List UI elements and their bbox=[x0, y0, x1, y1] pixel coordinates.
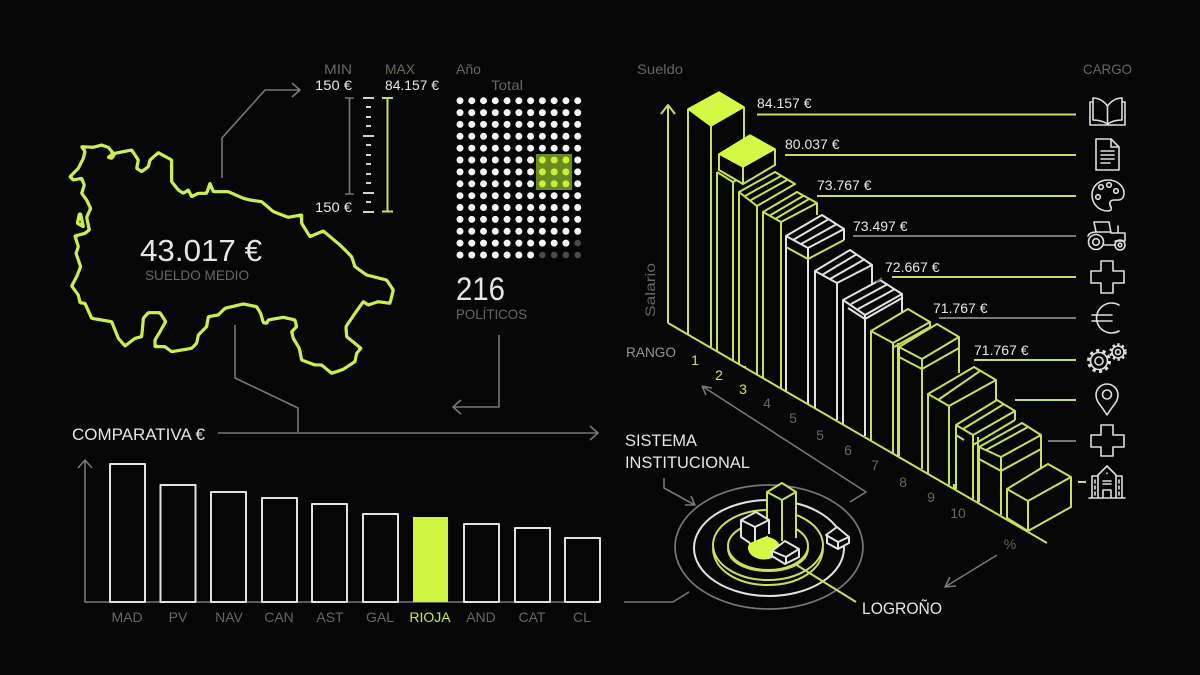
year label: Año bbox=[456, 61, 481, 77]
average salary value: 43.017 € bbox=[140, 233, 262, 268]
average salary label: SUELDO MEDIO bbox=[145, 267, 249, 283]
bar labels bbox=[111, 609, 591, 625]
bar 5 bbox=[786, 215, 844, 404]
bar 11 bbox=[956, 400, 1015, 503]
arrow: map to range scale bbox=[222, 83, 300, 178]
rank numbers: 4 bbox=[763, 395, 771, 411]
rank numbers: 2 bbox=[715, 367, 723, 383]
rank numbers: 7 bbox=[871, 457, 879, 473]
arrow: rank axis bbox=[702, 386, 866, 502]
max value: 84.157 € bbox=[385, 77, 439, 93]
salary values: 73.767 € bbox=[817, 177, 872, 193]
bar 13 bbox=[1007, 464, 1071, 531]
icon: document bbox=[1096, 139, 1119, 170]
arrow: percent bbox=[945, 555, 997, 587]
white cube left bbox=[741, 512, 769, 543]
rank numbers: 3 bbox=[739, 381, 747, 397]
y axis arrow bbox=[661, 105, 675, 323]
green range bar bbox=[382, 98, 393, 212]
icon: book bbox=[1090, 98, 1125, 125]
bar labels: RIOJA bbox=[409, 609, 451, 625]
white cube front bbox=[772, 541, 799, 564]
bar labels: MAD bbox=[111, 609, 143, 625]
rank numbers: % bbox=[1004, 536, 1016, 552]
bar 8 bbox=[871, 309, 930, 456]
panel: institutional system diagram bbox=[624, 431, 942, 618]
icon: cross bbox=[1091, 261, 1124, 293]
system title: INSTITUCIONAL bbox=[625, 453, 750, 472]
panel: map of La Rioja bbox=[70, 145, 393, 373]
bar 1 bbox=[688, 92, 744, 347]
comparison heading: COMPARATIVA € bbox=[72, 425, 206, 444]
rank numbers: 8 bbox=[899, 474, 907, 490]
arrow: politicians to comparison bbox=[453, 335, 499, 414]
gray range bar bbox=[345, 98, 354, 194]
bar labels: CAT bbox=[519, 609, 546, 625]
cargo heading: CARGO bbox=[1083, 61, 1132, 77]
rank numbers: 10 bbox=[950, 505, 966, 521]
icon: location pin bbox=[1096, 384, 1118, 415]
rank title: RANGO bbox=[626, 344, 676, 360]
bar 2 bbox=[717, 135, 775, 360]
green highlight square bbox=[536, 154, 572, 190]
connector: chart to rings bbox=[624, 592, 689, 602]
chart axes bbox=[78, 460, 600, 602]
rank numbers: 5 bbox=[816, 427, 824, 443]
chart heading salary: Sueldo bbox=[637, 61, 683, 77]
rank numbers: 5 bbox=[789, 410, 797, 426]
white cube right bbox=[826, 527, 849, 549]
tower bbox=[767, 483, 796, 542]
rank numbers: 1 bbox=[691, 352, 699, 368]
total label: Total bbox=[491, 77, 523, 93]
bar labels: CAN bbox=[264, 609, 294, 625]
rank numbers: 9 bbox=[927, 489, 935, 505]
system title: SISTEMA bbox=[625, 431, 698, 450]
bar labels: PV bbox=[169, 609, 188, 625]
center green disc bbox=[748, 536, 780, 560]
min label: MIN bbox=[324, 61, 352, 77]
map outline bbox=[70, 145, 393, 373]
leader line: Logroño bbox=[795, 564, 856, 602]
politicians total: 216 bbox=[456, 271, 505, 307]
panel: isometric salary chart bbox=[626, 61, 1086, 587]
salary values: 71.767 € bbox=[974, 342, 1029, 358]
tick scale bbox=[363, 98, 374, 212]
bar 6 bbox=[815, 250, 872, 420]
salary values bbox=[757, 95, 1029, 358]
y axis title: Salario bbox=[642, 263, 658, 317]
max label: MAX bbox=[385, 61, 416, 77]
bar labels: NAV bbox=[215, 609, 244, 625]
bar 3 bbox=[739, 172, 795, 374]
bar 10 bbox=[928, 367, 996, 489]
panel: dot matrix of politicians bbox=[456, 61, 581, 322]
politicians label: POLÍTICOS bbox=[456, 306, 527, 322]
arrow: map to comparison bbox=[235, 325, 298, 432]
icon: cross bbox=[1091, 425, 1124, 456]
icon: palette bbox=[1092, 180, 1124, 211]
dim dots bbox=[539, 240, 581, 258]
bar 4 bbox=[763, 192, 817, 388]
icon: tractor bbox=[1088, 222, 1125, 250]
bar 9 bbox=[899, 324, 959, 469]
arrow: system to rings bbox=[664, 478, 695, 505]
icon: gears bbox=[1088, 344, 1126, 372]
rank numbers: 6 bbox=[844, 442, 852, 458]
salary values: 80.037 € bbox=[785, 136, 840, 152]
highlighted bar: Rioja bbox=[413, 517, 448, 602]
system title bbox=[625, 431, 750, 472]
panel: job icons bbox=[1083, 61, 1132, 498]
panel: min max scale bbox=[315, 61, 439, 215]
leader lines bbox=[757, 114, 1086, 482]
green dots bbox=[539, 156, 569, 187]
concentric rings bbox=[675, 485, 863, 609]
salary values: 84.157 € bbox=[757, 95, 812, 111]
Logroño label: LOGROÑO bbox=[862, 598, 942, 618]
salary values: 73.497 € bbox=[853, 218, 908, 234]
bar labels: AST bbox=[316, 609, 344, 625]
bar 7 bbox=[843, 278, 902, 436]
salary values: 72.667 € bbox=[885, 259, 940, 275]
heading arrow bbox=[218, 426, 598, 440]
icon: hospital building bbox=[1089, 466, 1125, 498]
icon: euro bbox=[1092, 303, 1119, 333]
lower value: 150 € bbox=[315, 199, 352, 215]
panel: regional comparison bar chart bbox=[72, 425, 600, 625]
rank numbers bbox=[691, 352, 1016, 552]
salary values: 71.767 € bbox=[933, 300, 988, 316]
bar labels: CL bbox=[573, 609, 591, 625]
bar 12 bbox=[979, 423, 1041, 515]
bars bbox=[110, 464, 600, 602]
white dots bbox=[460, 101, 579, 255]
chart baseline bbox=[668, 323, 1047, 543]
bar labels: AND bbox=[466, 609, 496, 625]
bar labels: GAL bbox=[366, 609, 394, 625]
min value: 150 € bbox=[315, 77, 352, 93]
